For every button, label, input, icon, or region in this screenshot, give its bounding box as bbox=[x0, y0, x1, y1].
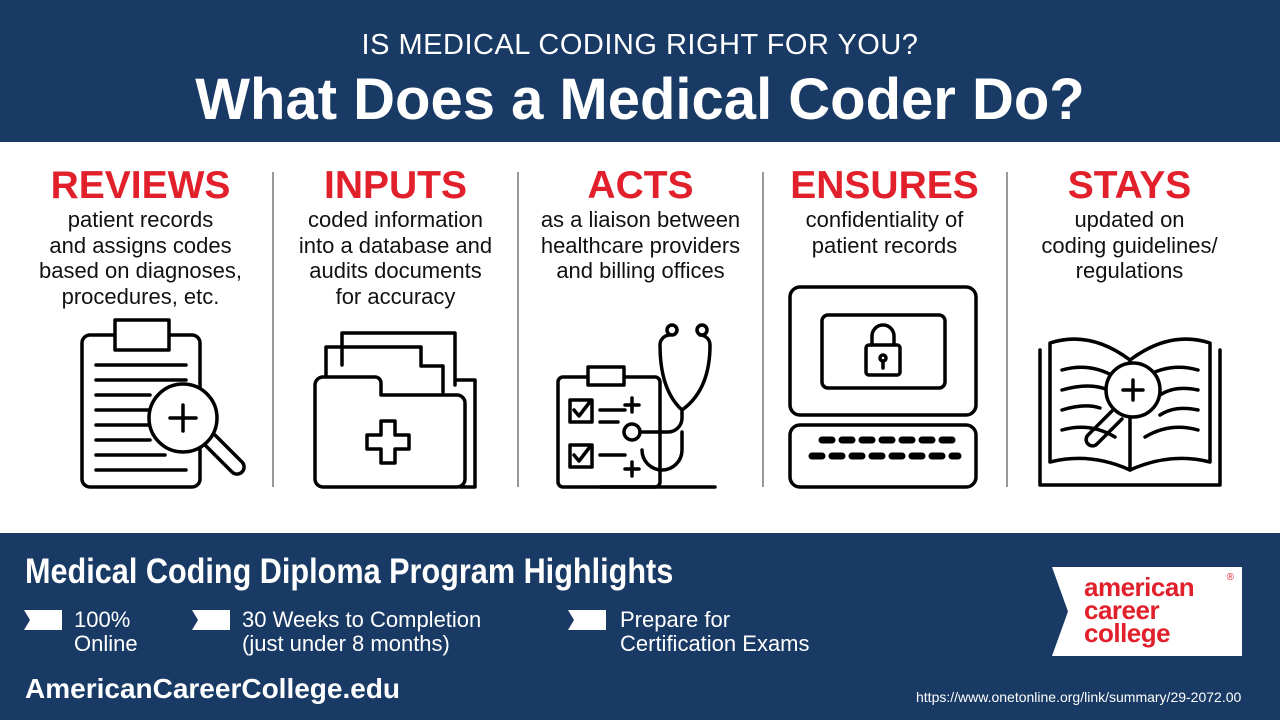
header banner bbox=[0, 0, 1280, 142]
footer band: Prepare for bbox=[620, 607, 730, 632]
logo: ® bbox=[1227, 572, 1234, 583]
column: reviews: REVIEWS bbox=[51, 164, 230, 207]
column: stays: regulations bbox=[1076, 258, 1183, 283]
column: reviews: patient records bbox=[68, 207, 213, 232]
icon: checklist with stethoscope bbox=[558, 325, 715, 487]
footer band: (just under 8 months) bbox=[242, 631, 450, 656]
column: inputs: coded information bbox=[308, 207, 483, 232]
column: stays bbox=[1041, 164, 1218, 283]
column: ensures: ENSURES bbox=[790, 164, 979, 207]
column: reviews bbox=[39, 164, 242, 308]
column: stays: STAYS bbox=[1068, 164, 1191, 207]
icon: open book with magnifier bbox=[1040, 339, 1220, 485]
column: ensures bbox=[790, 164, 979, 258]
column: reviews: and assigns codes bbox=[49, 232, 232, 258]
footer band: 100% bbox=[74, 607, 130, 632]
subtitle: IS MEDICAL CODING RIGHT FOR YOU? bbox=[362, 29, 918, 61]
footer band bbox=[0, 533, 1280, 720]
icons bbox=[80, 285, 1222, 489]
column: inputs: INPUTS bbox=[324, 164, 467, 207]
column: stays: coding guidelines/ bbox=[1041, 232, 1218, 258]
footer band: Online bbox=[74, 631, 138, 656]
column: inputs: audits documents bbox=[309, 258, 482, 283]
icon: medical folder bbox=[315, 333, 475, 487]
column: acts: as a liaison between bbox=[541, 207, 740, 232]
column: inputs bbox=[299, 164, 492, 308]
logo: career bbox=[1084, 595, 1159, 625]
source link: https://www.onetonline.org/link/summary/29-2072.00 bbox=[916, 689, 1241, 705]
highlight: 30 weeks bbox=[192, 607, 481, 656]
column: inputs: into a database and bbox=[299, 232, 492, 258]
footer band: Certification Exams bbox=[620, 631, 810, 656]
column: acts bbox=[541, 164, 740, 283]
column: inputs: for accuracy bbox=[336, 284, 455, 308]
logo: college bbox=[1084, 618, 1170, 648]
logo: american bbox=[1084, 572, 1194, 602]
column: acts: healthcare providers bbox=[541, 232, 740, 258]
footer band: 30 Weeks to Completion bbox=[242, 607, 481, 632]
website url: AmericanCareerCollege.edu bbox=[25, 673, 400, 704]
column: ensures: confidentiality of bbox=[806, 207, 963, 232]
footer heading: Medical Coding Diploma Program Highlights bbox=[25, 552, 673, 591]
column: acts: ACTS bbox=[587, 164, 694, 207]
column: acts: and billing offices bbox=[556, 258, 725, 283]
logo bbox=[1052, 567, 1242, 656]
highlight: certification bbox=[568, 607, 810, 656]
highlight: online bbox=[24, 607, 138, 656]
title: What Does a Medical Coder Do? bbox=[195, 67, 1085, 132]
column: reviews: based on diagnoses, bbox=[39, 258, 242, 283]
column: reviews: procedures, etc. bbox=[62, 284, 219, 308]
icon: clipboard with magnifier bbox=[82, 320, 244, 487]
icon: computer with lock bbox=[790, 287, 976, 487]
column: stays: updated on bbox=[1074, 207, 1185, 232]
column: ensures: patient records bbox=[812, 232, 957, 258]
